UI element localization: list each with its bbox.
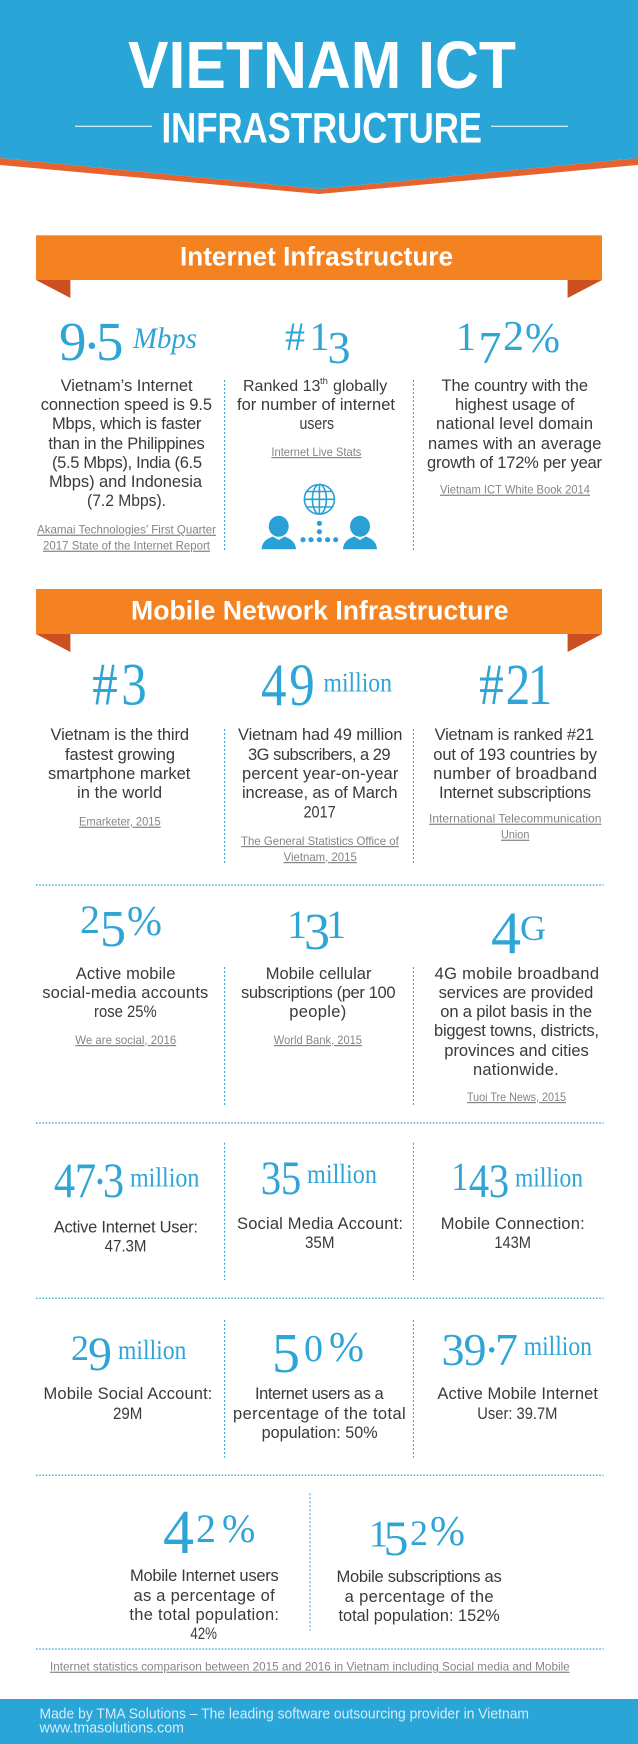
- text: 3G subscribers: Vietnam had 49 million: [238, 726, 402, 744]
- text: internet users percentage: population: 50%: [262, 1424, 378, 1442]
- text: social-media accounts: Active mobile: [76, 965, 175, 983]
- text: active internet user: 47.3M: [105, 1237, 146, 1255]
- panel: internet infrastructure: [36, 235, 602, 553]
- text: domain names: names with an average: [428, 435, 601, 453]
- ribbon heading: internet infrastructure: Internet Infrastructure: [180, 242, 453, 272]
- ribbon heading: mobile network infrastructure: Mobile Network Infrastructure: [131, 595, 509, 625]
- text: active mobile internet user: [437, 1385, 598, 1423]
- text: mobile social account: Mobile Social Account:: [44, 1385, 212, 1403]
- source: Tuoi Tre News: Tuoi Tre News, 2015: [467, 1090, 566, 1104]
- stat: 143 million: million: [515, 1163, 583, 1193]
- stat: 39.7 million: million: [524, 1331, 592, 1361]
- text: mobile cellular: Mobile cellular: [266, 965, 372, 983]
- text: third fastest: smartphone market: [48, 765, 191, 783]
- source: We are social: We are social, 2016: [75, 1033, 177, 1047]
- text: 4G services: on a pilot basis in the: [440, 1003, 592, 1021]
- stat: 29 million: million: [118, 1335, 187, 1365]
- stat: 49 million: million: [324, 668, 392, 698]
- text: connection speed: than in the Philippines: [48, 435, 205, 453]
- source: ITU: [429, 812, 601, 842]
- text: 3G subscribers: 3G subscribers, a 29: [248, 746, 391, 764]
- stat: 143 million: [451, 1154, 583, 1208]
- text: active mobile internet user: Active Mobile Internet: [437, 1385, 598, 1403]
- footer credit: Made by TMA Solutions – The leading software outsourcing provider in Vietnam: [40, 1705, 529, 1722]
- stat: 143 million: 4: [469, 1154, 489, 1208]
- text: social-media accounts: rose 25%: [94, 1003, 157, 1021]
- text: domain names: The country with the: [442, 377, 588, 395]
- text: social media account: 35M: [305, 1234, 334, 1252]
- text: active internet user: Active Internet User:: [54, 1218, 198, 1236]
- text: third fastest: in the world: [77, 784, 162, 802]
- stat: 4G: 4: [491, 900, 521, 966]
- stat: 131: 1: [326, 902, 346, 947]
- text: mobile cellular: subscriptions (per 100: [241, 984, 396, 1002]
- stat: 172%: 1: [456, 314, 476, 359]
- source: General Statistics Office: The General Statistics Office of: [241, 834, 399, 848]
- text: connection speed: Vietnam’s Internet: [61, 377, 193, 395]
- text: 4G services: [434, 965, 599, 1079]
- text: social-media accounts: [42, 965, 208, 1021]
- stat: 152%: %: [430, 1509, 465, 1555]
- stat: #13: 3: [328, 322, 350, 373]
- stat: 9.5 Mbps: Mbps: [132, 322, 197, 355]
- stat: 172%: 7: [478, 322, 502, 373]
- text: social media account: [237, 1215, 403, 1252]
- text: ranked 21: Internet subscriptions: [439, 784, 591, 802]
- text: mobile connection: 143M: [494, 1234, 531, 1252]
- stat: 9.5 Mbps: [59, 299, 197, 372]
- text: third fastest: Vietnam is the third: [50, 726, 189, 744]
- text: mobile subscriptions percentage: a percentage of the: [345, 1588, 494, 1606]
- source: General Statistics Office: [241, 834, 399, 864]
- text: ranked 21: out of 193 countries by: [433, 746, 598, 764]
- stat: 143 million: 3: [489, 1154, 509, 1208]
- stat: 143 million: 1: [451, 1156, 468, 1200]
- stat: 29 million: 2: [71, 1328, 89, 1368]
- stat: 35 million: 35: [261, 1151, 301, 1205]
- text: internet users percentage: Internet users as a: [255, 1385, 385, 1403]
- text: connection speed: (7.2 Mbps).: [87, 492, 166, 510]
- text: ranked 21: [433, 726, 598, 802]
- stat: 42%: 4: [163, 1499, 194, 1567]
- stat: #21: #21: [479, 652, 552, 717]
- ribbon heading: internet infrastructure: [36, 235, 602, 298]
- stat: 152%: 1: [369, 1514, 388, 1556]
- text: mobile connection: [441, 1215, 585, 1252]
- text: connection speed: Mbps) and Indonesia: [49, 473, 203, 491]
- text: mobile cellular: [241, 965, 396, 1021]
- text: mobile cellular: people): [289, 1003, 346, 1021]
- text: social media account: Social Media Account:: [237, 1215, 403, 1233]
- source: ITU: International Telecommunication: [429, 812, 601, 826]
- stat: 47.3 million: 47.3: [54, 1141, 124, 1209]
- text: ranked 13th: users: [300, 415, 334, 433]
- text: domain names: growth of 172% per year: [427, 454, 602, 472]
- text: mobile internet users percentage: the total population:: [129, 1606, 279, 1624]
- stat: 42%: %: [222, 1506, 255, 1551]
- text: connection speed: Mbps, which is faster: [52, 415, 202, 433]
- stat: 50%: 5: [272, 1323, 300, 1385]
- text: mobile subscriptions percentage: total population: 152%: [338, 1607, 500, 1625]
- subtitle: INFRASTRUCTURE: [162, 104, 482, 152]
- text: 4G services: nationwide.: [473, 1061, 559, 1079]
- text: 4G services: biggest towns, districts,: [434, 1022, 599, 1040]
- stat: 49 million: 49: [261, 652, 315, 719]
- stat: 131: 1: [287, 902, 307, 947]
- stat: #13: #1: [285, 314, 330, 359]
- text: internet users percentage: percentage of the total: [233, 1405, 406, 1423]
- footer website: www.tmasolutions.com: [39, 1720, 184, 1737]
- text: connection speed: (5.5 Mbps), India (6.5: [52, 454, 202, 472]
- ribbon heading: mobile network infrastructure: [36, 589, 602, 652]
- source: Akamai: 2017 State of the Internet Report: [43, 539, 211, 553]
- stat: 131: 3: [304, 904, 330, 961]
- text: ranked 21: Vietnam is ranked #21: [435, 726, 594, 744]
- text: 4G services: provinces and cities: [444, 1042, 589, 1060]
- text: ranked 13th: [237, 376, 395, 433]
- stat: 35 million: [261, 1151, 377, 1205]
- text: 4G services: 4G mobile broadband: [435, 965, 599, 983]
- panel: mobile network infrastructure: [36, 589, 604, 1674]
- source: Emarketer: Emarketer, 2015: [79, 815, 161, 829]
- text: domain names: [427, 377, 602, 472]
- stat: 39.7 million: 39.7: [442, 1311, 518, 1375]
- text: mobile internet users percentage: [129, 1567, 279, 1643]
- stat: 50%: 0: [304, 1328, 323, 1370]
- source: Akamai: [37, 523, 216, 553]
- text: ranked 13th: for number of internet: [237, 396, 395, 414]
- stat: 29 million: 9: [88, 1328, 112, 1381]
- source: Vietnam ICT White Book: Vietnam ICT White Book 2014: [440, 483, 590, 497]
- text: 4G services: services are provided: [439, 984, 593, 1002]
- text: domain names: national level domain: [436, 415, 593, 433]
- source: statistics comparison note: Internet statistics comparison between 2015 and 2016 in Vietnam including Social media and Mobile: [50, 1660, 570, 1674]
- stat: 50%: %: [329, 1325, 364, 1371]
- source: Akamai: Akamai Technologies’ First Quarter: [37, 523, 216, 537]
- text: social-media accounts: social-media accounts: [42, 984, 208, 1002]
- stat: 35 million: million: [307, 1159, 377, 1189]
- text: third fastest: [48, 726, 191, 802]
- text: mobile social account: [44, 1385, 212, 1423]
- text: 3G subscribers: percent year-on-year: [242, 765, 399, 783]
- source: World Bank: World Bank, 2015: [274, 1033, 362, 1047]
- stat: 152%: 2: [410, 1513, 428, 1553]
- stat: 49 million: [261, 652, 392, 719]
- text: 3G subscribers: increase, as of March: [242, 784, 398, 802]
- source: ITU: Union: [501, 828, 529, 842]
- stat: 29 million: [71, 1328, 187, 1381]
- text: active internet user: [54, 1218, 198, 1255]
- text: 3G subscribers: 2017: [304, 804, 336, 822]
- stat: 25%: 2: [80, 897, 100, 942]
- text: mobile internet users percentage: as a percentage of: [134, 1587, 275, 1605]
- text: mobile social account: 29M: [113, 1405, 142, 1423]
- text: mobile subscriptions percentage: [336, 1568, 502, 1625]
- text: connection speed: connection speed is 9.5: [41, 396, 212, 414]
- stat: 9.5 Mbps: 9.5: [59, 299, 124, 372]
- text: ranked 13th: Ranked 13: [243, 378, 320, 395]
- header banner: [0, 0, 638, 194]
- stat: 25%: %: [127, 899, 162, 945]
- text: mobile subscriptions percentage: Mobile subscriptions as: [336, 1568, 502, 1586]
- stat: 39.7 million: [442, 1311, 592, 1375]
- text: ranked 13th: th: [320, 376, 328, 387]
- text: mobile connection: Mobile Connection:: [441, 1215, 585, 1233]
- stat: #3: #3: [92, 652, 147, 719]
- stat: 25%: 5: [100, 901, 126, 958]
- source: General Statistics Office: Vietnam, 2015: [284, 850, 357, 864]
- text: ranked 13th: globally: [328, 378, 387, 395]
- text: third fastest: fastest growing: [65, 746, 175, 764]
- text: internet users percentage: [233, 1385, 406, 1442]
- title: VIETNAM ICT: [128, 28, 516, 103]
- text: ranked 21: number of broadband: [433, 765, 597, 783]
- stat: 47.3 million: million: [130, 1163, 200, 1193]
- text: mobile internet users percentage: Mobile Internet users: [130, 1567, 279, 1585]
- text: 3G subscribers: [238, 726, 402, 822]
- text: mobile internet users percentage: 42%: [190, 1625, 217, 1643]
- stat: 4G: G: [520, 908, 546, 948]
- stat: 47.3 million: [54, 1141, 200, 1209]
- footer: [0, 1699, 638, 1744]
- stat: 172%: 2: [503, 314, 524, 360]
- icon: people connected through globe: [262, 484, 377, 549]
- text: domain names: highest usage of: [455, 396, 575, 414]
- text: connection speed: [41, 377, 212, 510]
- source: Internet Live Stats: Internet Live Stats: [271, 445, 361, 459]
- text: active mobile internet user: User: 39.7M: [477, 1405, 557, 1423]
- stat: 152%: 5: [384, 1510, 408, 1566]
- stat: 172%: %: [525, 316, 560, 362]
- stat: 42%: 2: [196, 1506, 216, 1551]
